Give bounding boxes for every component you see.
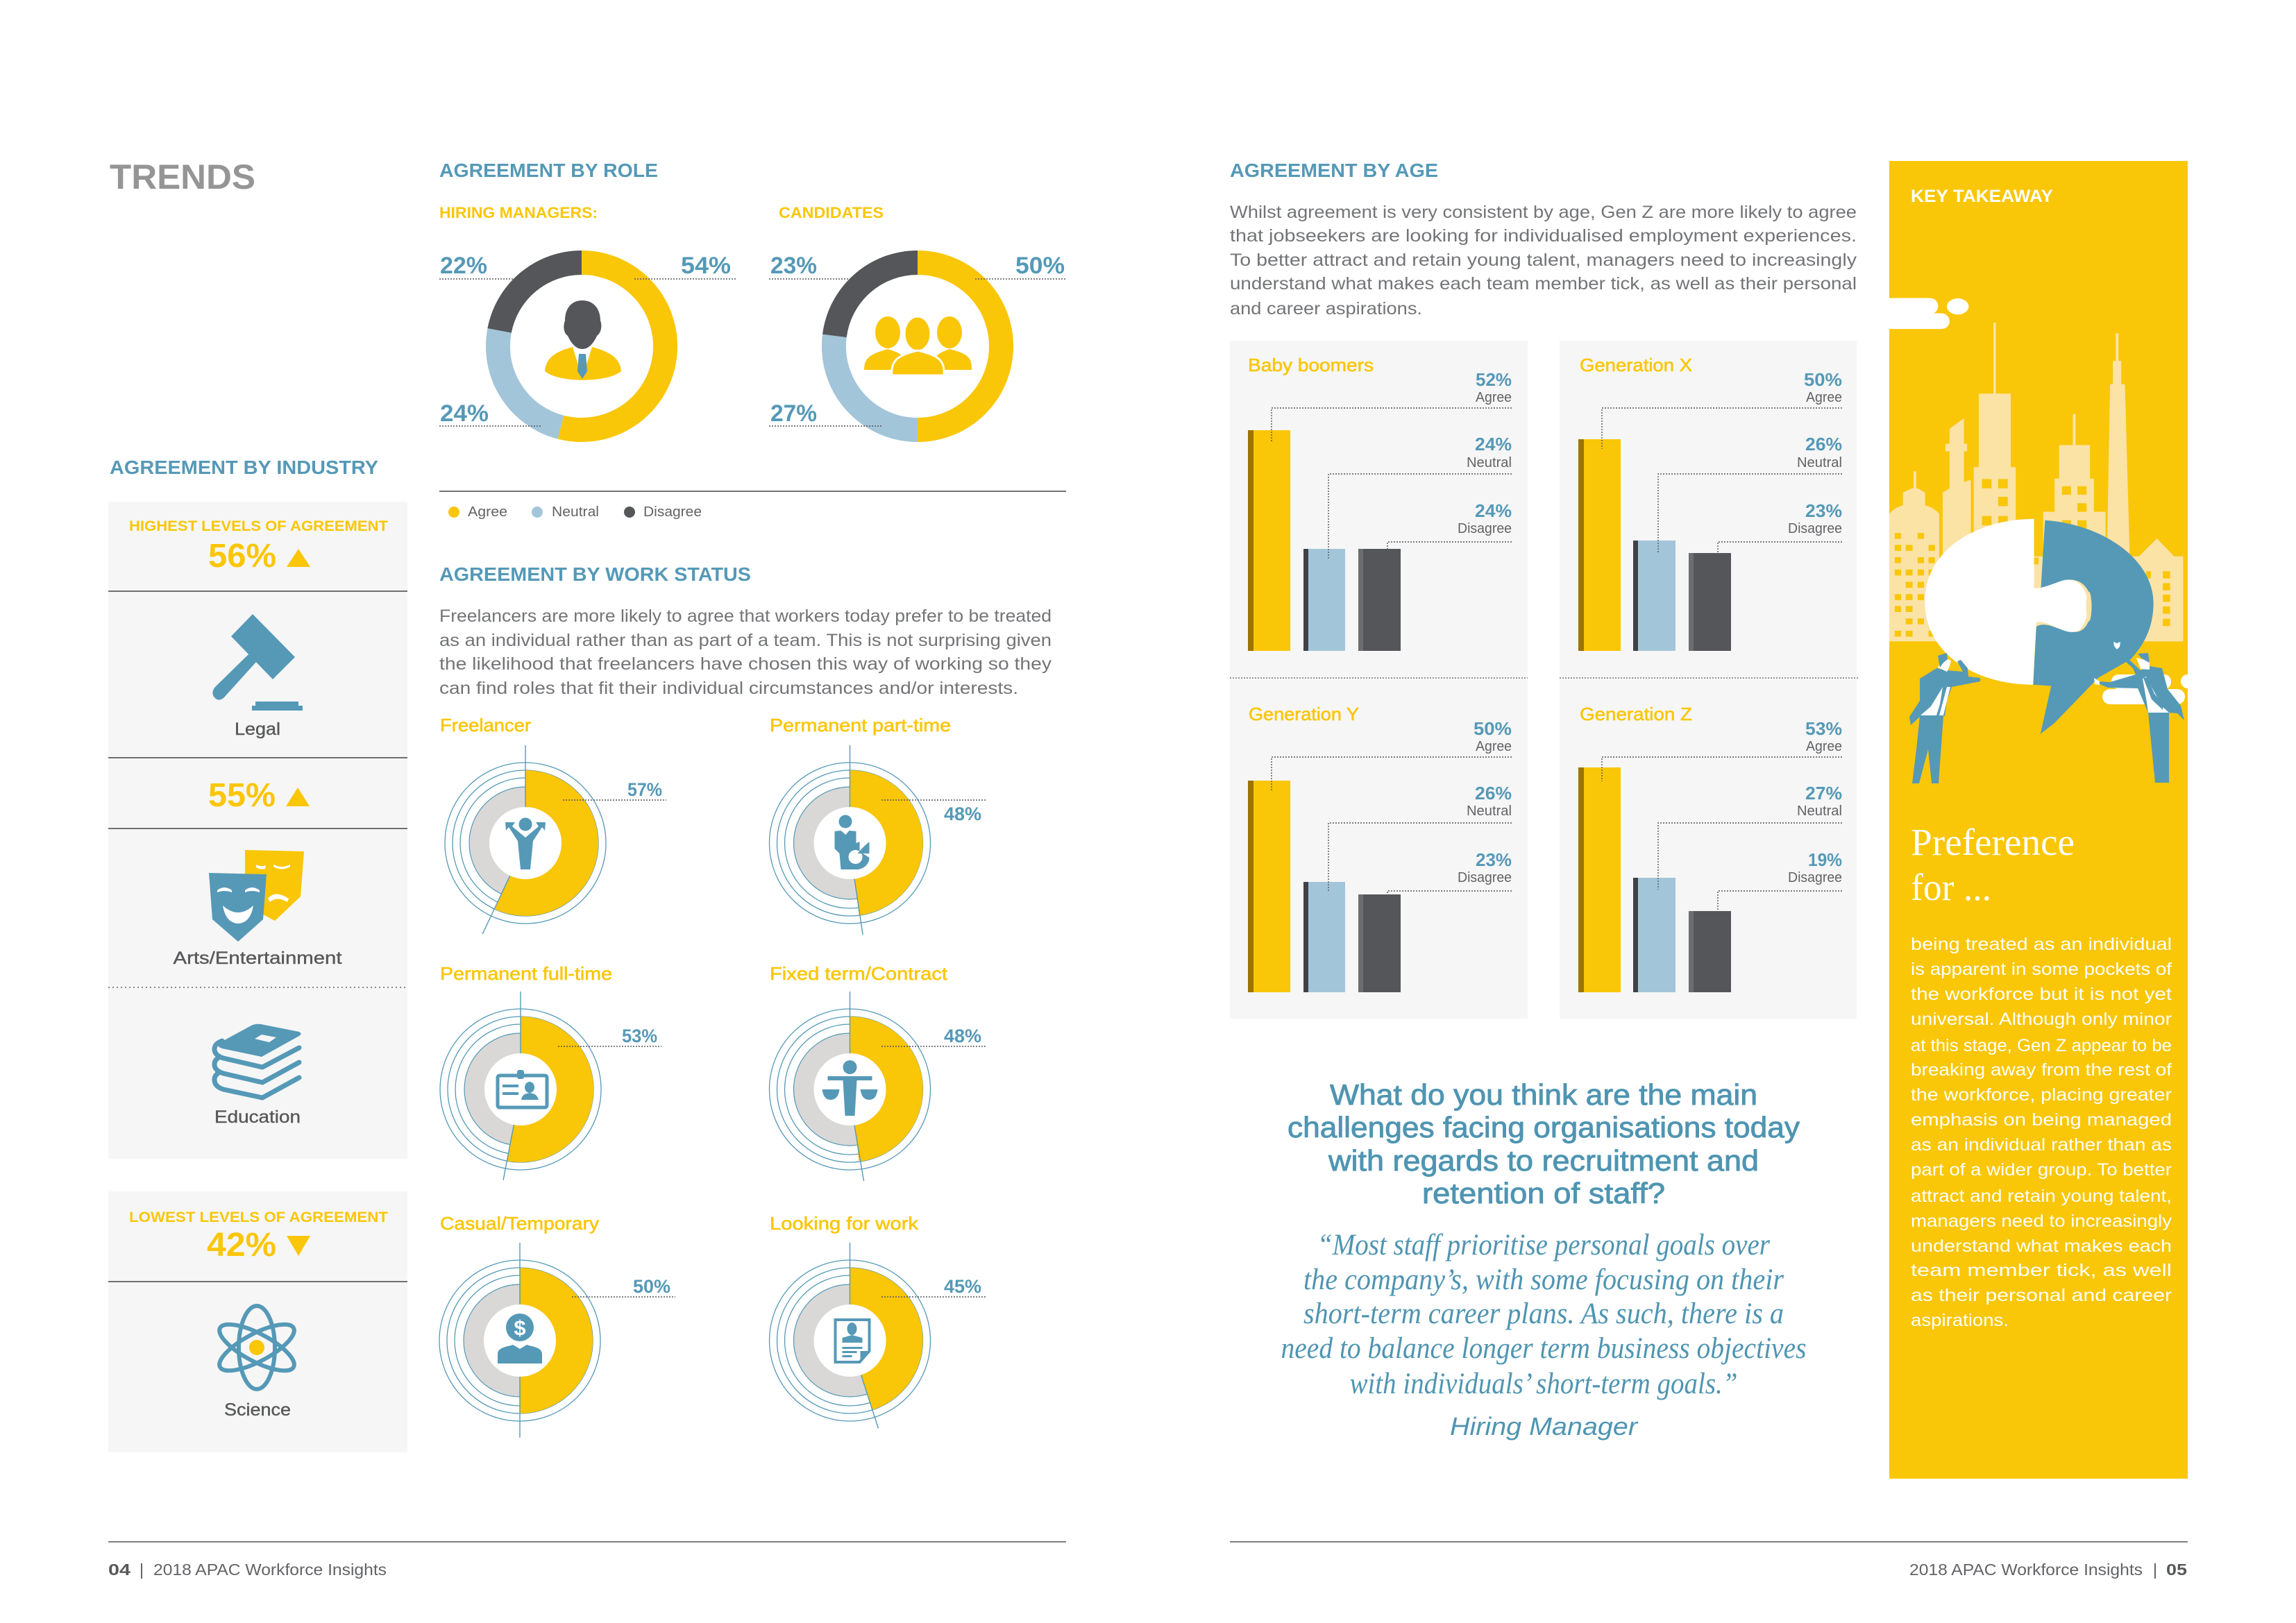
- chart: baby boomers: 24%: [1475, 434, 1512, 454]
- chart: baby boomers: 52%: [1476, 369, 1512, 390]
- icon: theatre masks: [209, 850, 304, 942]
- value labels: work status: 48%: [944, 1026, 981, 1046]
- chart: generation y: Disagree: [1458, 870, 1512, 885]
- text block: takeaway body: is apparent in some pockets of: [1911, 960, 2172, 979]
- chart: generation y: Generation Y: [1249, 704, 1359, 724]
- text block: work status intro: [439, 606, 1052, 698]
- chart: casual / temporary: [439, 1213, 600, 1438]
- text block: takeaway body: understand what makes each: [1911, 1237, 2172, 1256]
- chart: fixed term / contract: Fixed term/Contract: [770, 963, 948, 984]
- value labels: work status: 48%: [944, 804, 981, 824]
- card: highest: Education: [214, 1107, 301, 1127]
- chart: generation y: 50%: [1474, 718, 1512, 739]
- text block: work status intro: can find roles that fit their individual circumstances and/or interests.: [439, 679, 1018, 698]
- heading: agreement by age: AGREEMENT BY AGE: [1230, 160, 1438, 181]
- value labels: work status: 57%: [627, 779, 662, 800]
- legend: Agree: [468, 504, 507, 520]
- panel: agreement by work status: [439, 563, 1052, 1438]
- value labels: work status: 45%: [944, 1276, 981, 1297]
- panel: agreement by age: [1230, 160, 1858, 1019]
- legend: Neutral: [552, 504, 599, 520]
- value labels: 23%: [770, 253, 817, 279]
- icon: gavel: [212, 614, 303, 711]
- footer: left: 04: [108, 1561, 130, 1579]
- value labels: work status: 50%: [633, 1276, 670, 1297]
- clouds: lower right: [2102, 674, 2188, 704]
- footer: left: [108, 1542, 1066, 1579]
- chart: permanent full-time: [440, 963, 612, 1180]
- text block: takeaway body: breaking away from the rest of: [1911, 1060, 2172, 1080]
- value labels: 27%: [770, 400, 817, 427]
- text block: takeaway body: team member tick, as well: [1911, 1261, 2172, 1280]
- value labels: [439, 253, 1066, 427]
- chart: generation z: 19%: [1808, 849, 1842, 870]
- chart: generation x: Agree: [1806, 390, 1842, 405]
- chart: generation z: Neutral: [1797, 804, 1842, 819]
- chart: permanent part-time: [769, 715, 951, 935]
- quote: need to balance longer term business objectives: [1281, 1332, 1806, 1365]
- chart: generation z: 27%: [1805, 783, 1842, 804]
- chart: generation x: 50%: [1804, 369, 1842, 390]
- footer: left: |: [140, 1561, 144, 1579]
- icon: id card: [498, 1070, 547, 1107]
- text block: question: What do you think are the main: [1330, 1078, 1757, 1111]
- text block: takeaway body: [1911, 935, 2172, 1330]
- icon: money person: $: [514, 1316, 526, 1340]
- heading: agreement by role: AGREEMENT BY ROLE: [439, 160, 658, 181]
- chart: generation x: Disagree: [1788, 521, 1842, 536]
- text block: takeaway body: aspirations.: [1911, 1311, 2009, 1330]
- chart: generation z: Disagree: [1788, 870, 1842, 885]
- text block: age intro: Whilst agreement is very consistent by age, Gen Z are more likely to agree: [1230, 203, 1857, 222]
- text block: takeaway body: the workforce but it is not yet: [1911, 985, 2172, 1004]
- card: lowest: [108, 1191, 407, 1452]
- chart: baby boomers: Disagree: [1458, 521, 1512, 536]
- chart: generation z: [1578, 704, 1842, 992]
- icon: books: [214, 1024, 301, 1098]
- chart: generation x: 23%: [1805, 500, 1842, 521]
- text block: age intro: that jobseekers are looking for individualised employment experiences.: [1230, 226, 1857, 246]
- chart: generation y: Agree: [1476, 739, 1512, 754]
- value labels: 54%: [681, 253, 731, 279]
- icon: part-time worker: [834, 815, 870, 869]
- quote: with individuals’ short-term goals.”: [1349, 1368, 1738, 1400]
- chart: baby boomers: Baby boomers: [1248, 355, 1374, 375]
- quote: short-term career plans. As such, there is a: [1303, 1298, 1784, 1330]
- footer: right: 05: [2166, 1561, 2187, 1579]
- value labels: work status: [558, 779, 986, 1297]
- text block: takeaway body: managers need to increasingly: [1911, 1212, 2172, 1231]
- chart: generation y: [1248, 704, 1512, 992]
- chart: generation y: 26%: [1475, 783, 1512, 804]
- legend: [448, 504, 702, 520]
- heading: preference for: [1911, 821, 2075, 908]
- card: highest: Arts/Entertainment: [174, 949, 342, 968]
- card: highest: 55%: [208, 777, 276, 814]
- quote: [1281, 1229, 1806, 1400]
- chart: generation x: Neutral: [1797, 455, 1842, 470]
- card: highest: 56%: [208, 538, 276, 575]
- donut: hiring managers: [498, 262, 666, 430]
- footer: right: 2018 APAC Workforce Insights: [1909, 1561, 2143, 1579]
- heading: preference for: Preference: [1911, 821, 2075, 863]
- panel: agreement by role: [439, 160, 1066, 520]
- text block: takeaway body: attract and retain young talent,: [1911, 1187, 2172, 1206]
- text block: takeaway body: universal. Although only minor: [1911, 1010, 2172, 1029]
- legend: Disagree: [643, 504, 702, 520]
- chart: freelancer: [440, 715, 606, 934]
- label: hiring managers: HIRING MANAGERS:: [439, 204, 598, 221]
- chart: generation y: 23%: [1476, 849, 1512, 870]
- quote: “Most staff prioritise personal goals over: [1317, 1229, 1770, 1261]
- card: highest: [108, 502, 407, 1159]
- heading: agreement by work status: AGREEMENT BY WORK STATUS: [439, 563, 751, 585]
- chart: generation x: Generation X: [1580, 355, 1692, 375]
- footer: right: [1230, 1542, 2188, 1579]
- chart: fixed term / contract: [769, 963, 948, 1181]
- icon: atom: [214, 1306, 300, 1389]
- text block: takeaway body: at this stage, Gen Z appear to be: [1911, 1036, 2172, 1055]
- text block: takeaway body: as an individual rather than as: [1911, 1135, 2172, 1155]
- quote attribution: Hiring Manager: [1450, 1412, 1639, 1441]
- card: lowest: Science: [224, 1400, 291, 1420]
- icon: money person: [498, 1314, 542, 1363]
- label: candidates: CANDIDATES: [779, 204, 884, 221]
- heading: agreement by industry: AGREEMENT BY INDUSTRY: [110, 457, 378, 478]
- text block: age intro: understand what makes each team member tick, as well as their personal: [1230, 274, 1857, 294]
- chart: generation x: 26%: [1805, 434, 1842, 454]
- text block: question: [1288, 1078, 1800, 1209]
- chart: baby boomers: Neutral: [1467, 455, 1512, 470]
- text block: age intro: [1230, 203, 1857, 318]
- chart: looking for work: [769, 1213, 930, 1428]
- chart: permanent part-time: Permanent part-time: [770, 715, 951, 736]
- text block: age intro: To better attract and retain young talent, managers need to increasingly: [1230, 250, 1857, 270]
- footer: right: |: [2153, 1561, 2157, 1579]
- icon: freelancer: [505, 817, 546, 869]
- heading: key takeaway: KEY TAKEAWAY: [1911, 187, 2053, 206]
- icon: manager: [545, 300, 621, 380]
- value labels: work status: 53%: [622, 1026, 657, 1046]
- text block: question: challenges facing organisations today: [1288, 1111, 1800, 1144]
- text block: takeaway body: part of a wider group. To better: [1911, 1160, 2172, 1180]
- value labels: 24%: [440, 400, 489, 427]
- value labels: 22%: [440, 253, 487, 279]
- title: trends: TRENDS: [110, 158, 255, 196]
- panel: agreement by industry: [108, 457, 407, 1452]
- chart: freelancer: Freelancer: [440, 715, 531, 736]
- icon: candidates group: [864, 316, 972, 375]
- text block: takeaway body: being treated as an individual: [1911, 935, 2172, 954]
- text block: question: retention of staff?: [1422, 1177, 1665, 1209]
- chart: permanent full-time: Permanent full-time: [440, 963, 612, 984]
- text block: work status intro: the likelihood that freelancers have chosen this way of working so they: [439, 654, 1052, 674]
- chart: generation x: [1578, 355, 1842, 651]
- text block: takeaway body: as their personal and career: [1911, 1286, 2172, 1305]
- chart: generation y: Neutral: [1467, 804, 1512, 819]
- donut: candidates: [834, 262, 1002, 430]
- footer: left: 2018 APAC Workforce Insights: [153, 1561, 387, 1579]
- text block: work status intro: as an individual rather than as part of a team. This is not surprising given: [439, 631, 1052, 650]
- chart: generation z: 53%: [1805, 718, 1842, 739]
- quote: the company’s, with some focusing on their: [1303, 1264, 1784, 1296]
- chart: generation z: Agree: [1806, 739, 1842, 754]
- icon: resume: [836, 1320, 869, 1362]
- text block: work status intro: Freelancers are more likely to agree that workers today prefer to be treated: [439, 606, 1052, 626]
- card: lowest: 42%: [207, 1227, 276, 1264]
- chart: looking for work: Looking for work: [770, 1213, 919, 1234]
- chart: generation z: Generation Z: [1580, 704, 1692, 724]
- card: highest: HIGHEST LEVELS OF AGREEMENT: [129, 518, 388, 534]
- heading: preference for: for ...: [1911, 866, 1991, 908]
- figure: left man: [1909, 653, 1980, 783]
- illustration: city skyline and puzzle speech bubble: [1889, 298, 2183, 734]
- text block: question: with regards to recruitment and: [1328, 1144, 1759, 1177]
- value labels: 50%: [1015, 253, 1065, 279]
- chart: baby boomers: Agree: [1476, 390, 1512, 405]
- text block: takeaway body: the workforce, placing greater: [1911, 1085, 2172, 1105]
- text block: takeaway body: emphasis on being managed: [1911, 1110, 2172, 1130]
- panel: key takeaway: [1889, 161, 2188, 1479]
- chart: casual / temporary: Casual/Temporary: [440, 1213, 599, 1234]
- card: lowest: LOWEST LEVELS OF AGREEMENT: [129, 1209, 388, 1225]
- icon: scales person: [822, 1060, 877, 1116]
- chart: baby boomers: [1248, 355, 1512, 651]
- card: highest: Legal: [235, 720, 280, 739]
- figure: right man: [2094, 642, 2184, 783]
- chart: baby boomers: 24%: [1475, 500, 1512, 521]
- text block: age intro: and career aspirations.: [1230, 299, 1422, 318]
